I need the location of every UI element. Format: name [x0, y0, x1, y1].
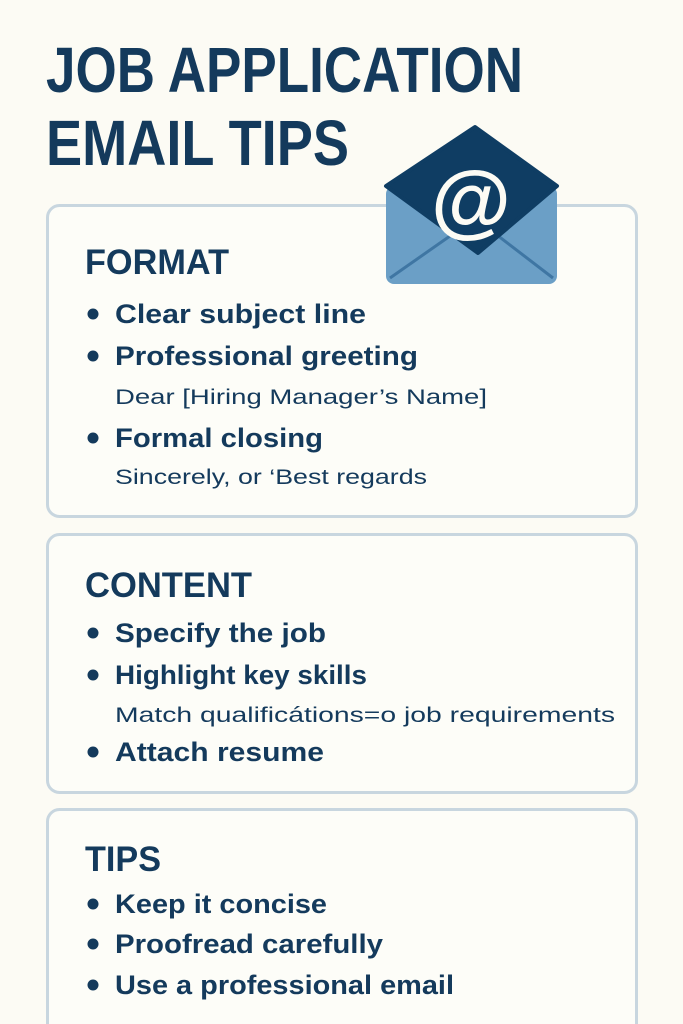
content items: Specify the job: [115, 618, 326, 648]
title: JOB APPLICATION: [46, 34, 523, 106]
format items: Professional greeting: [115, 341, 418, 371]
format items: Clear subject line: [115, 299, 366, 329]
tips items: Use a professional email: [115, 970, 454, 1000]
heading: format: FORMAT: [85, 243, 229, 282]
format items: Sincerely, or ‘Best regards: [115, 466, 427, 489]
heading: content: CONTENT: [85, 566, 252, 605]
tips items: Keep it concise: [115, 889, 327, 919]
icon: envelope: [386, 127, 557, 284]
tips items: Proofread carefully: [115, 929, 383, 959]
panel: tips: [48, 810, 636, 1024]
content items: Match qualificátions=o job requirements: [115, 704, 615, 727]
content items: [88, 618, 615, 767]
title: EMAIL TIPS: [46, 107, 349, 179]
panel: format: [48, 206, 636, 516]
tips items: [88, 889, 454, 1000]
format items: Formal closing: [115, 423, 323, 453]
content items: Attach resume: [115, 737, 324, 767]
format items: [88, 299, 487, 489]
title: [46, 34, 523, 179]
heading: tips: TIPS: [85, 840, 161, 879]
format items: Dear [Hiring Manager’s Name]: [115, 386, 487, 409]
icon: envelope: @: [431, 155, 511, 246]
content items: Highlight key skills: [115, 660, 367, 690]
panel: content: [48, 534, 636, 792]
